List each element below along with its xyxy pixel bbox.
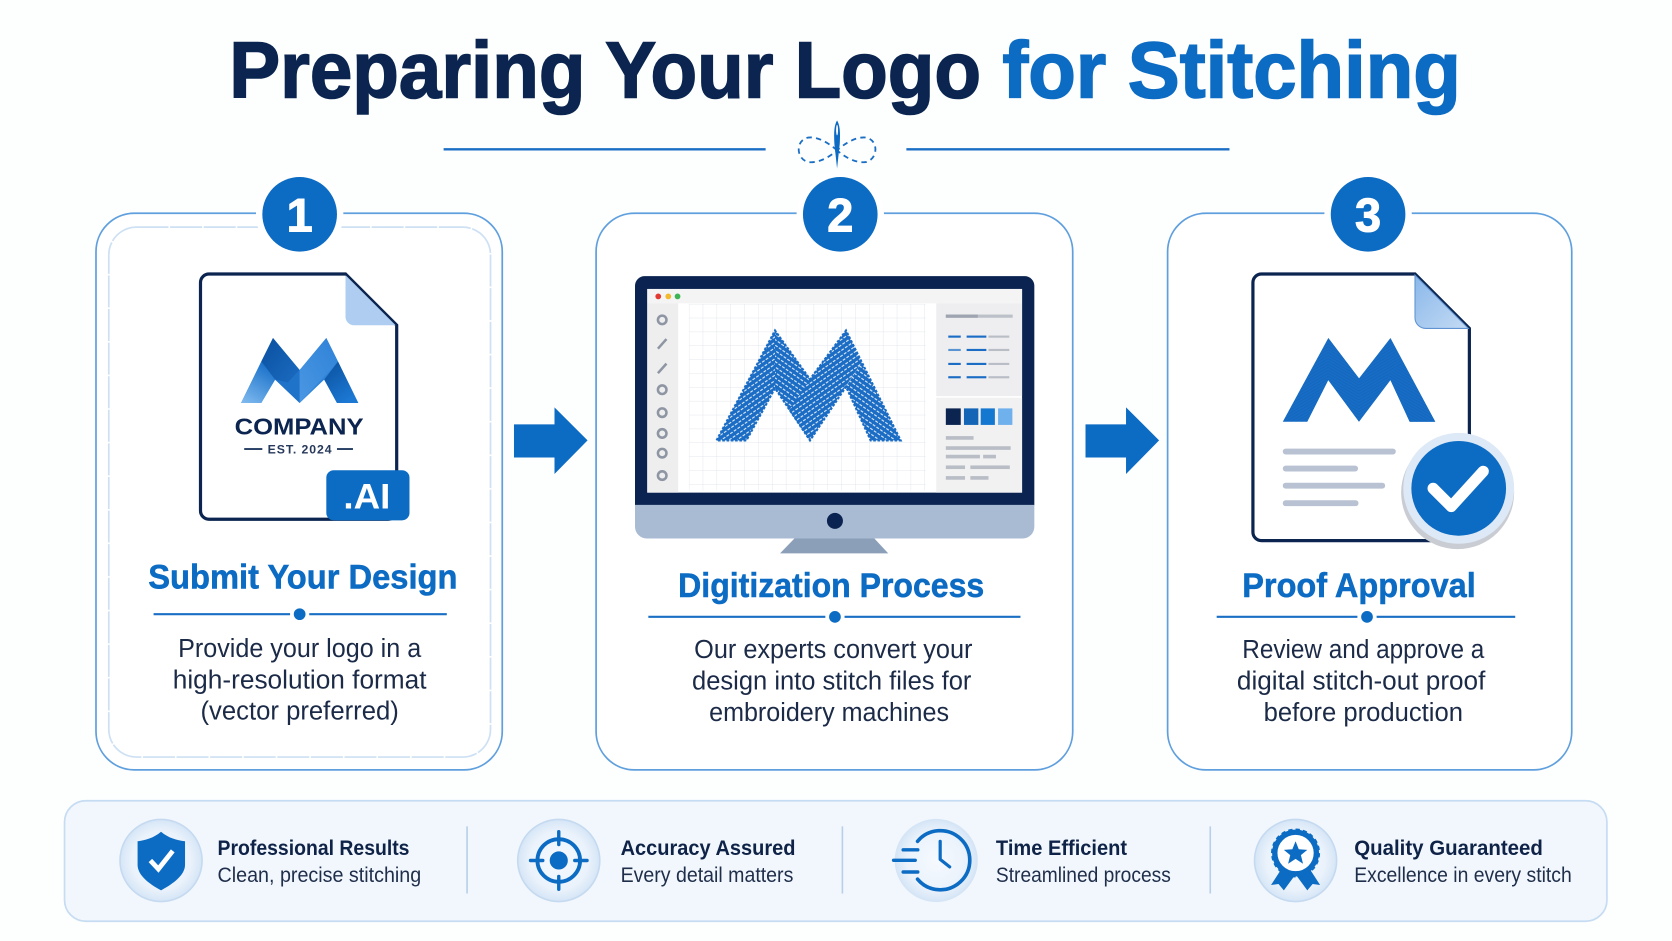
icon: shield — [120, 819, 202, 902]
benefit: professional results: Clean, precise stitching — [218, 864, 421, 887]
description text — [1237, 636, 1486, 727]
benefit: time efficient: Time Efficient — [996, 836, 1127, 860]
icon: AI file document with company logo: .AI — [343, 478, 390, 517]
step number 1 — [262, 177, 337, 252]
arrow: step 2 to step 3 — [1086, 407, 1159, 474]
divider with dot — [648, 611, 1020, 623]
benefit: accuracy assured — [518, 819, 795, 902]
arrow: step 1 to step 2 — [514, 407, 588, 474]
benefit: time efficient — [894, 819, 1171, 902]
description text — [692, 636, 973, 727]
panel: step 1 submit your design — [96, 171, 502, 770]
description text: before production — [1264, 699, 1463, 727]
icon: clock — [894, 819, 977, 902]
benefit: professional results: Professional Results — [218, 836, 409, 860]
step number 2 — [803, 177, 878, 252]
description text: high-resolution format — [173, 666, 427, 694]
icon: AI file document with company logo — [200, 274, 409, 520]
benefit: quality guaranteed: Excellence in every stitch — [1354, 864, 1572, 887]
description text: (vector preferred) — [200, 698, 399, 726]
benefit: time efficient: Streamlined process — [996, 864, 1171, 887]
icon: AI file document with company logo: COMPANY — [235, 414, 364, 440]
icon: award ribbon — [1255, 819, 1337, 902]
description text: digital stitch-out proof — [1237, 667, 1486, 695]
step number 3: 3 — [1355, 189, 1381, 241]
icon: monitor with digitizing software — [635, 276, 1034, 553]
panel: benefits strip — [65, 801, 1607, 921]
description text: design into stitch files for — [692, 667, 972, 695]
description text — [173, 635, 427, 726]
heading: Proof Approval: Proof Approval — [1242, 567, 1476, 605]
benefit: quality guaranteed — [1255, 819, 1572, 902]
icon: target — [518, 819, 600, 902]
icon: proof document with check badge — [1253, 274, 1514, 549]
panel: step 2 digitization process — [596, 171, 1073, 770]
icon: needle and thread divider — [444, 120, 1229, 168]
benefit: quality guaranteed: Quality Guaranteed — [1354, 836, 1543, 860]
step number 1: 1 — [287, 189, 313, 241]
description text: Provide your logo in a — [178, 635, 422, 663]
title: for Stitching — [1002, 26, 1461, 115]
description text: Review and approve a — [1242, 636, 1485, 664]
description text: embroidery machines — [709, 699, 949, 727]
benefit: accuracy assured: Every detail matters — [621, 864, 793, 887]
benefit: accuracy assured: Accuracy Assured — [621, 836, 795, 860]
icon: AI file document with company logo: EST. 2024 — [268, 443, 332, 457]
heading: Submit Your Design: Submit Your Design — [148, 559, 457, 597]
divider with dot — [1217, 611, 1515, 623]
description text: Our experts convert your — [694, 636, 973, 664]
panel: step 3 proof approval — [1168, 171, 1572, 770]
title — [229, 26, 1461, 115]
heading: Digitization Process: Digitization Process — [678, 567, 984, 605]
divider with dot — [154, 608, 447, 620]
benefit: professional results — [120, 819, 421, 902]
step number 2: 2 — [827, 189, 853, 241]
step number 3 — [1331, 177, 1405, 252]
stitched M logo — [717, 331, 901, 440]
title: Preparing Your Logo — [229, 26, 981, 115]
